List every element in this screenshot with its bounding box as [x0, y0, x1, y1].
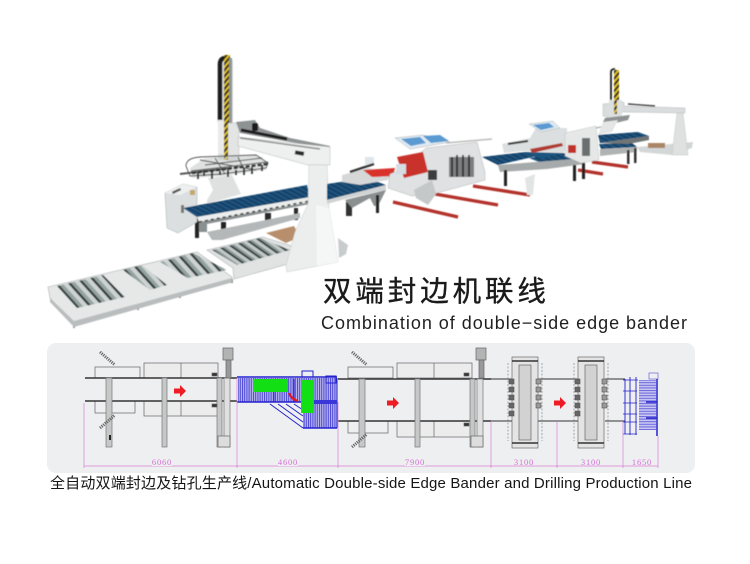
dimension labels: 3100 [514, 457, 534, 467]
schematic: drilling unit 1 [508, 357, 542, 448]
caption: 全自动双端封边及钻孔生产线/Automatic Double-side Edge Bander and Drilling Production Line [50, 474, 692, 492]
green panel vertical [301, 380, 314, 413]
middle roller table [207, 226, 300, 279]
connecting rails [491, 379, 625, 421]
red arrow 1 [174, 385, 186, 397]
left conveyor frame and legs [195, 196, 310, 240]
red arrow 2 [387, 397, 399, 409]
blue conveyor [181, 185, 310, 222]
title: English: Combination of double−side edge bander [321, 313, 687, 333]
schematic: blue loader [237, 371, 337, 428]
control cabinet [165, 184, 197, 233]
panel: layout plan [47, 343, 695, 473]
dimension labels [152, 457, 652, 467]
dimension labels: 1650 [632, 457, 652, 467]
left roller table [48, 252, 232, 328]
drilling machine [565, 126, 606, 163]
robot rear base [207, 175, 241, 204]
green panel horizontal [253, 379, 288, 392]
gantry beam [236, 120, 330, 165]
schematic: stacker [623, 373, 658, 436]
dimension labels: 6060 [152, 457, 172, 467]
schematic: edge bander 2 [338, 348, 491, 447]
dimension lines [84, 378, 658, 468]
right side conveyor after pillar [327, 178, 386, 216]
dimension labels: 4600 [278, 457, 298, 467]
suction gripper frame [180, 155, 268, 179]
title: Chinese: 双端封边机联线 [323, 269, 550, 310]
red curved arrow [289, 393, 298, 401]
front gantry pillar [286, 165, 348, 272]
right blue tables [598, 132, 649, 164]
red outriggers [393, 162, 628, 217]
dimension labels: 7900 [405, 457, 425, 467]
edge bander one [388, 135, 492, 205]
right gantry [598, 69, 693, 155]
production line machine illustration [48, 55, 693, 328]
infeed unit [342, 157, 395, 185]
red arrow 3 [554, 397, 566, 409]
schematic: edge bander 1 [85, 348, 237, 447]
middle blue tables [482, 152, 585, 195]
schematic: drilling unit 2 [574, 357, 608, 448]
left gantry column [218, 55, 239, 161]
edge bander two [502, 121, 567, 153]
dimension labels: 3100 [581, 457, 601, 467]
